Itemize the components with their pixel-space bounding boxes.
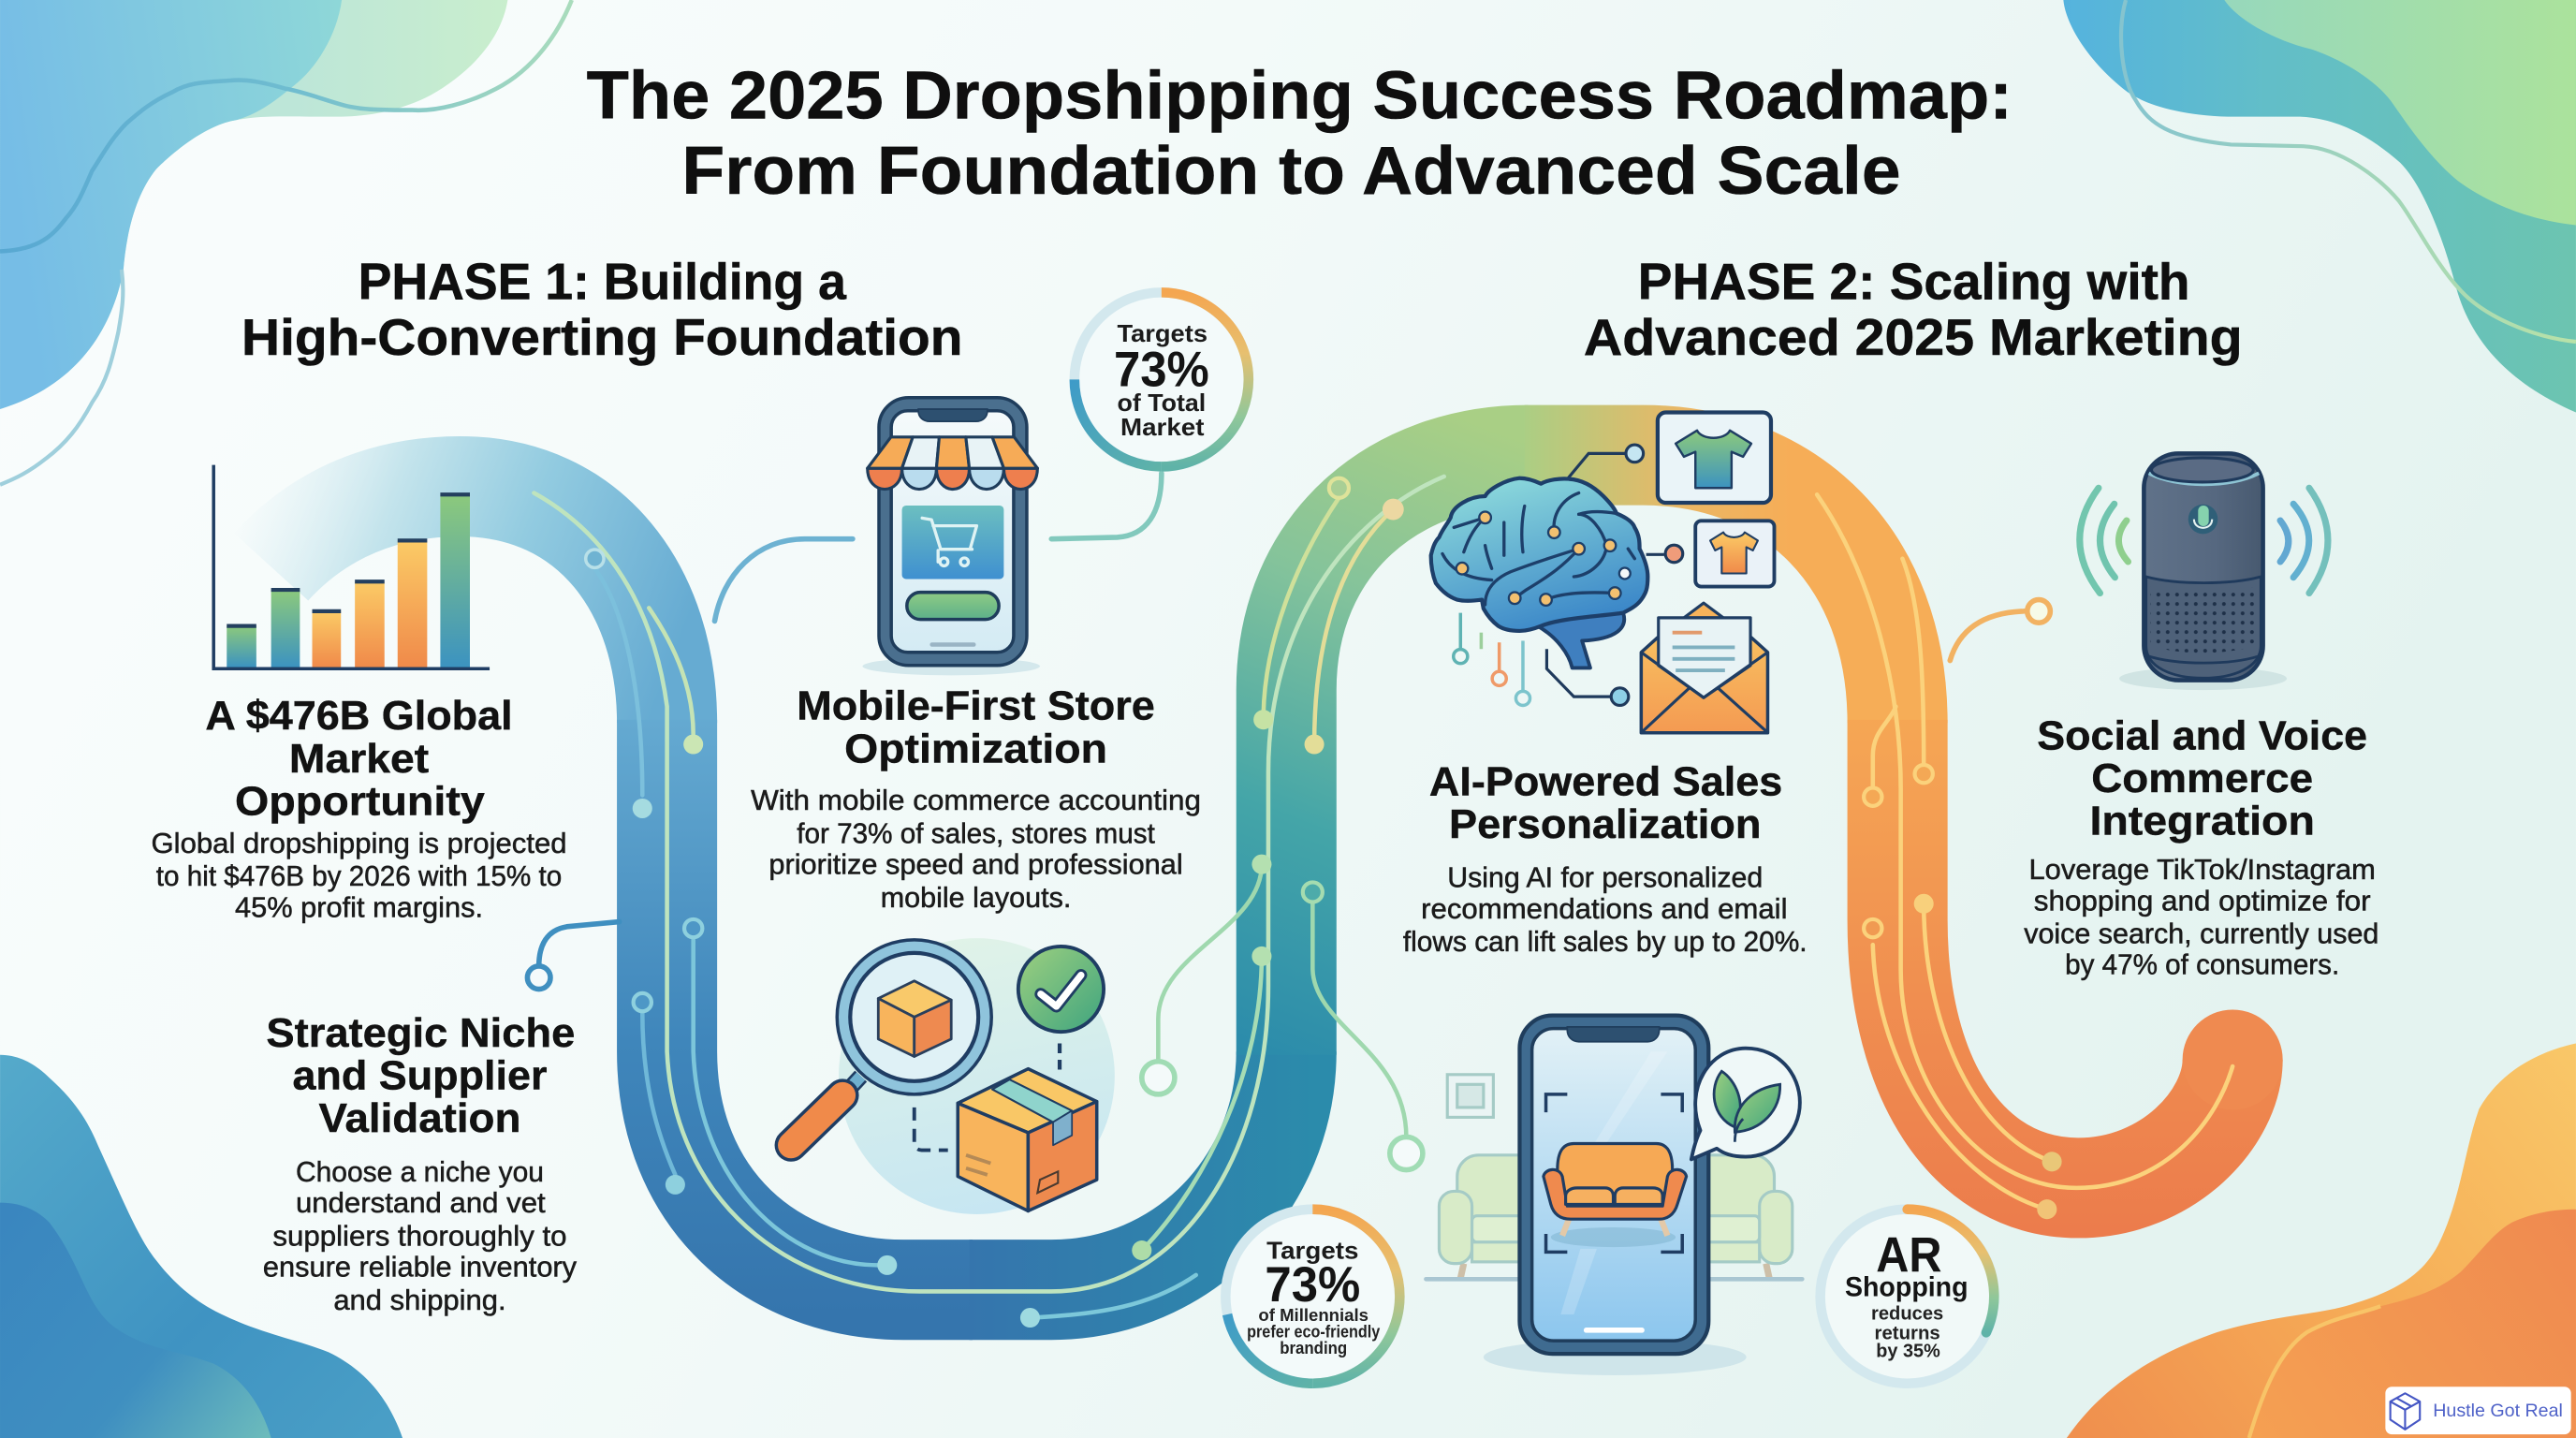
connector: mobile store icon to stat bubble bbox=[1051, 473, 1162, 539]
text block: AI personalization: AI-Powered Sales bbox=[1429, 758, 1782, 804]
winding roadmap road bbox=[271, 455, 2283, 1290]
text block: mobile-first store: prioritize speed and professional bbox=[768, 848, 1183, 881]
stat bubble: 73% of total market: Market bbox=[1120, 415, 1205, 441]
text block: niche and supplier bbox=[263, 1010, 578, 1316]
text block: mobile-first store bbox=[751, 683, 1201, 914]
stat bubble: 73% of total market: of Total bbox=[1117, 390, 1206, 417]
big shipping box bbox=[958, 1069, 1097, 1211]
stat bubble: 73% of total market: 73% bbox=[1114, 342, 1209, 397]
connector: road to niche section bbox=[527, 922, 620, 990]
text block: market opportunity: A $476B Global bbox=[205, 693, 513, 739]
text block: AI personalization: Personalization bbox=[1449, 801, 1761, 847]
stat bubble: 73% of millennials: branding bbox=[1280, 1338, 1347, 1357]
email envelope bbox=[1641, 603, 1767, 733]
text block: niche and supplier: Strategic Niche bbox=[266, 1010, 575, 1056]
icon: AI brain with product cards bbox=[1431, 413, 1774, 733]
stat bubble: 73% of millennials: of Millennials bbox=[1258, 1305, 1368, 1325]
heading: phase 1 bbox=[242, 253, 963, 366]
text block: social and voice commerce: voice search, currently used bbox=[2024, 917, 2378, 949]
icon: bar chart bbox=[213, 465, 490, 668]
text block: mobile-first store: for 73% of sales, stores must bbox=[797, 816, 1155, 849]
text block: social and voice commerce: by 47% of consumers. bbox=[2065, 948, 2339, 981]
stat bubble: AR shopping: returns bbox=[1875, 1323, 1940, 1343]
stat bubble: AR shopping: Shopping bbox=[1845, 1272, 1969, 1303]
icon: magnifier and verified box bbox=[791, 938, 1115, 1214]
text block: social and voice commerce: Commerce bbox=[2091, 756, 2313, 801]
heading: phase 2 bbox=[1584, 253, 2243, 366]
product card: teal tee bbox=[1658, 413, 1771, 503]
heading: phase 2: Advanced 2025 Marketing bbox=[1584, 309, 2243, 366]
stat bubble: 73% of millennials bbox=[1225, 1210, 1399, 1384]
title bbox=[587, 58, 2012, 209]
text block: AI personalization: flows can lift sales by up to 20%. bbox=[1403, 925, 1808, 958]
watermark badge: Hustle Got Real bbox=[2433, 1401, 2563, 1421]
room scene bbox=[1439, 1075, 1793, 1278]
stat bubble: 73% of millennials: prefer eco-friendly bbox=[1247, 1322, 1381, 1342]
road circuit lines: phase 1 bbox=[534, 477, 1444, 1328]
stat bubble: 73% of millennials: 73% bbox=[1265, 1257, 1360, 1313]
text block: market opportunity bbox=[152, 693, 567, 923]
stat bubble: 73% of millennials: Targets bbox=[1266, 1238, 1358, 1264]
text block: niche and supplier: ensure reliable inventory bbox=[263, 1251, 578, 1284]
text block: social and voice commerce: Integration bbox=[2089, 799, 2315, 844]
icon: cube logo bbox=[2391, 1393, 2420, 1430]
small inspected box bbox=[878, 981, 951, 1056]
icon: mobile storefront phone bbox=[862, 398, 1040, 675]
decorative blob: top left bbox=[0, 0, 572, 485]
title: The 2025 Dropshipping Success Roadmap: bbox=[587, 58, 2012, 133]
text block: niche and supplier: and Supplier bbox=[292, 1053, 547, 1099]
cart glyph bbox=[922, 518, 976, 565]
road circuit lines: phase 2 bbox=[1817, 494, 2232, 1219]
icon: AR shopping phone with sofa bbox=[1426, 1016, 1802, 1375]
text block: mobile-first store: mobile layouts. bbox=[881, 881, 1071, 914]
text block: niche and supplier: Choose a niche you bbox=[296, 1155, 544, 1188]
decorative blob: bottom right bbox=[2067, 1043, 2576, 1438]
watermark badge bbox=[2385, 1387, 2571, 1434]
text block: AI personalization: Using AI for personalized bbox=[1447, 861, 1763, 894]
eco leaf speech bubble bbox=[1691, 1049, 1800, 1159]
text block: market opportunity: Market bbox=[289, 736, 430, 782]
connector: road to voice speaker bbox=[1950, 600, 2050, 661]
text block: AI personalization bbox=[1403, 758, 1808, 958]
text block: market opportunity: Opportunity bbox=[235, 778, 485, 824]
text block: social and voice commerce: Social and Voice bbox=[2037, 712, 2367, 758]
text block: AI personalization: recommendations and email bbox=[1421, 892, 1788, 925]
text block: mobile-first store: Mobile-First Store bbox=[797, 683, 1155, 729]
stat bubble: 73% of total market: Targets bbox=[1117, 321, 1208, 347]
connector: road to mobile store icon bbox=[714, 539, 853, 621]
decorative blob: top right bbox=[2063, 0, 2576, 413]
text block: market opportunity: Global dropshipping is projected bbox=[152, 827, 567, 859]
AR sofa bbox=[1544, 1143, 1687, 1236]
stat bubble: AR shopping bbox=[1821, 1210, 1995, 1384]
stat bubble: 73% of total market bbox=[1075, 292, 1249, 466]
text block: mobile-first store: Optimization bbox=[844, 726, 1107, 771]
stat bubble: AR shopping: AR bbox=[1876, 1227, 1942, 1283]
text block: niche and supplier: and shipping. bbox=[333, 1284, 506, 1316]
decorative blob: bottom left bbox=[0, 1055, 402, 1438]
text block: mobile-first store: With mobile commerce accounting bbox=[751, 784, 1201, 816]
stat bubble: AR shopping: by 35% bbox=[1876, 1342, 1940, 1362]
stat bubble: AR shopping: reduces bbox=[1871, 1303, 1943, 1324]
awning bbox=[868, 437, 1037, 490]
text block: market opportunity: 45% profit margins. bbox=[235, 890, 483, 923]
icon: smart speaker bbox=[2080, 453, 2328, 690]
text block: niche and supplier: understand and vet bbox=[296, 1186, 546, 1219]
heading: phase 1: PHASE 1: Building a bbox=[359, 253, 847, 310]
text block: social and voice commerce: Loverage TikTok/Instagram bbox=[2029, 853, 2376, 886]
brain network wires bbox=[1546, 445, 1683, 705]
text block: social and voice commerce bbox=[2024, 712, 2378, 981]
heading: phase 2: PHASE 2: Scaling with bbox=[1638, 253, 2190, 310]
text block: social and voice commerce: shopping and optimize for bbox=[2034, 884, 2371, 917]
product card: orange tee bbox=[1695, 521, 1774, 587]
heading: phase 1: High-Converting Foundation bbox=[242, 309, 963, 366]
text block: niche and supplier: Validation bbox=[319, 1095, 520, 1141]
text block: market opportunity: to hit $476B by 2026 with 15% to bbox=[156, 859, 562, 892]
text block: niche and supplier: suppliers thoroughly to bbox=[272, 1219, 567, 1252]
sound waves bbox=[2080, 488, 2328, 594]
title: From Foundation to Advanced Scale bbox=[681, 134, 1901, 209]
brain stem and cerebellum bbox=[1538, 612, 1624, 668]
